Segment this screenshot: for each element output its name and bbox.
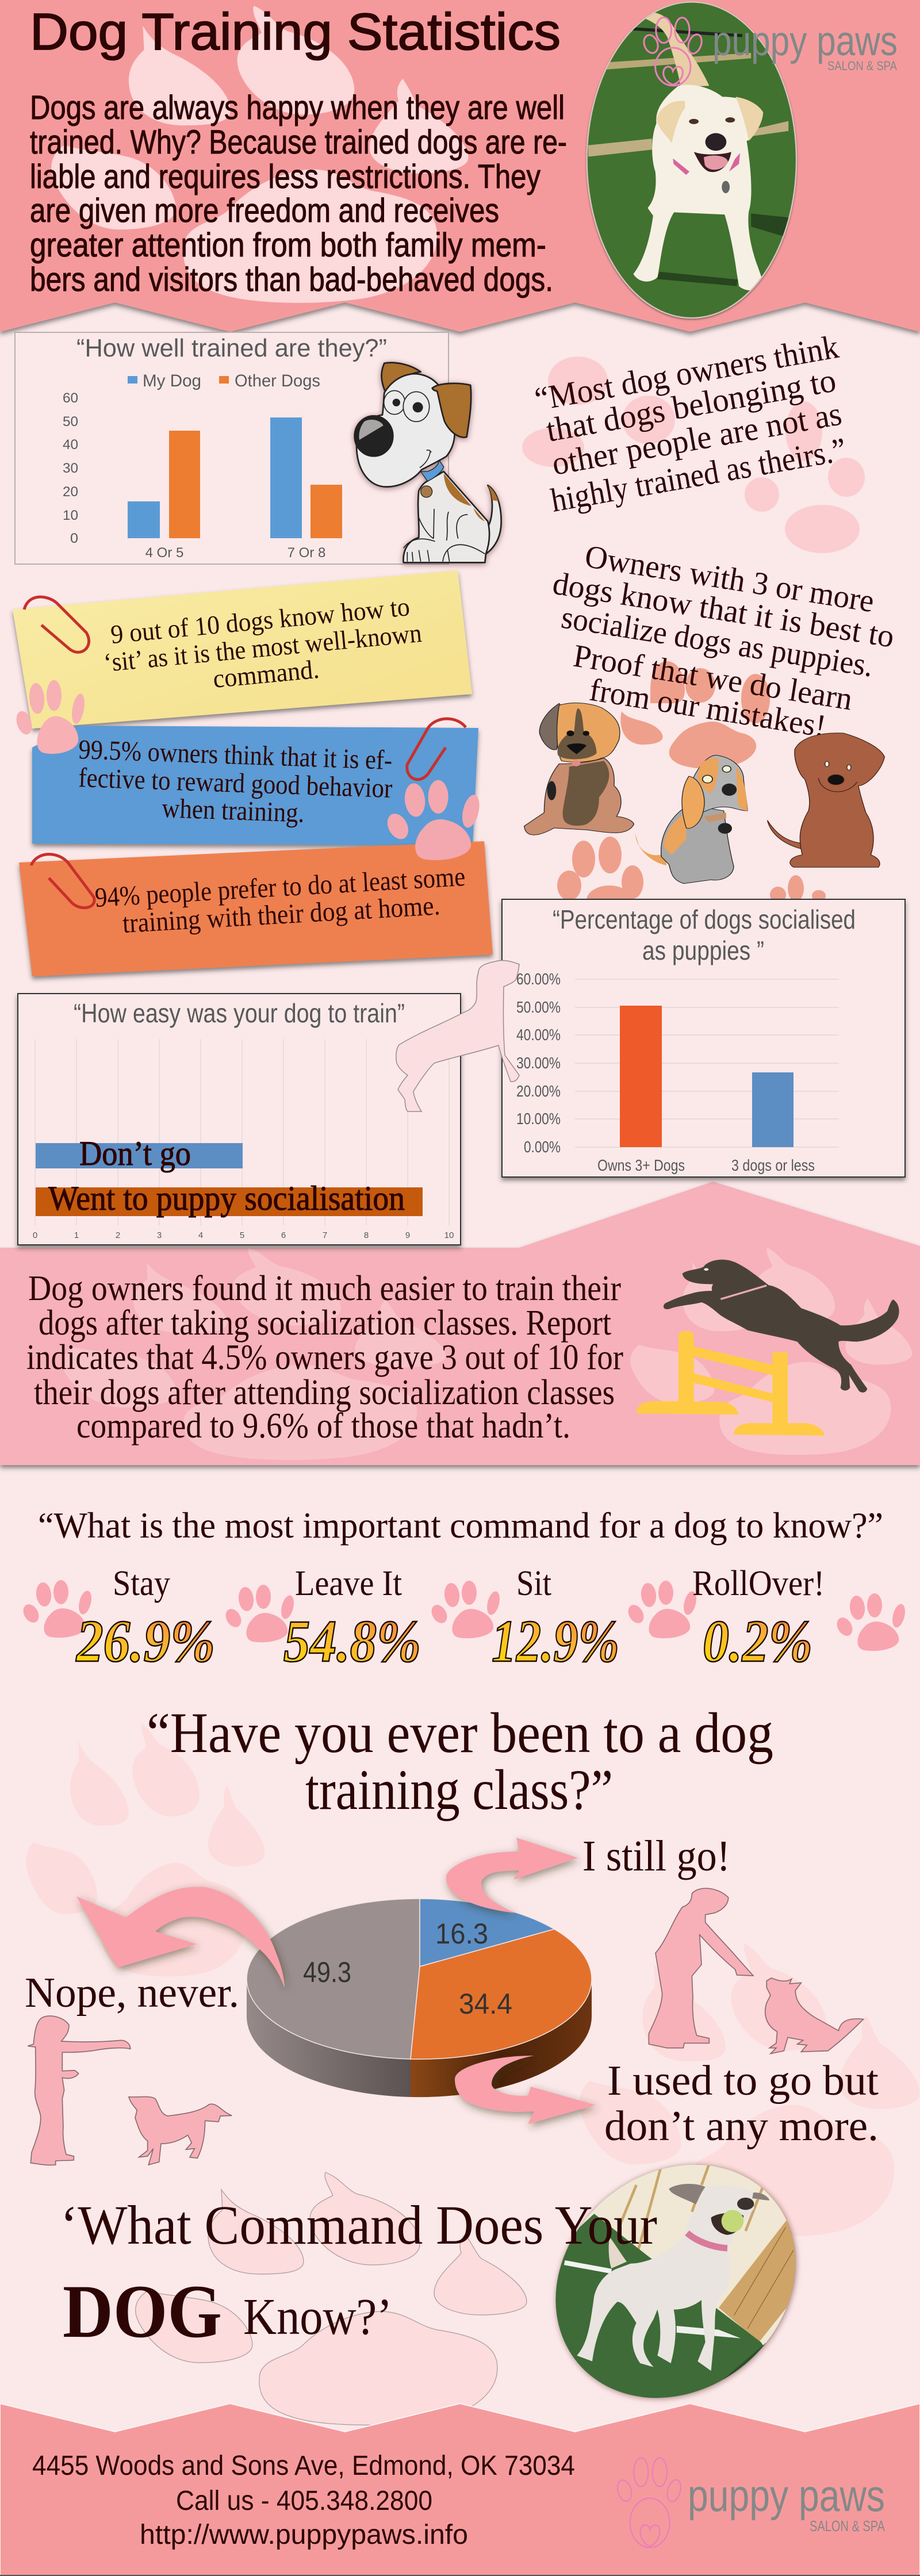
bar: went to puppy socialisation: Went to puppy socialisation: [48, 1179, 405, 1217]
intro text: are given more freedom and receives: [30, 192, 499, 229]
y axis: 20: [63, 484, 78, 500]
x axis labels: [33, 1230, 454, 1240]
pie chart: training class attendance: 49.3: [303, 1956, 351, 1988]
band background paw left: [63, 1248, 446, 1460]
logo: puppy paws footer: [615, 2458, 885, 2548]
y axis: 0: [70, 531, 78, 546]
closing headline: ‘What Command Does Your: [60, 2194, 657, 2256]
sticky text orange: training with their dog at home.: [122, 890, 441, 939]
y axis: 10: [63, 508, 78, 523]
x axis labels: 1: [74, 1230, 79, 1240]
label: i still go: I still go!: [582, 1832, 730, 1880]
y axis: 40: [63, 437, 78, 453]
sticky text yellow: command.: [212, 654, 320, 693]
salmon paws behind dogs: [557, 661, 826, 915]
label: used to go: don’t any more.: [604, 2103, 879, 2150]
sticky text blue: [78, 734, 393, 829]
heading: dog training class: “Have you ever been to a dog: [147, 1701, 773, 1765]
icon: jumping dog: [664, 1260, 899, 1393]
intro text: Dogs are always happy when they are well: [30, 89, 565, 126]
band text: Dog owners found it much easier to train their: [28, 1269, 621, 1308]
footer address: 4455 Woods and Sons Ave, Edmond, OK 73034: [32, 2451, 575, 2481]
label: nope never: Nope, never.: [25, 1969, 239, 2017]
x axis labels: 3: [157, 1230, 162, 1240]
quote: owners with 3 or more: from our mistakes!: [587, 672, 829, 745]
logo: puppy paws footer: SALON & SPA: [810, 2517, 885, 2535]
quote: most dog owners: highly trained as theirs.”: [548, 430, 849, 519]
puppy left: [524, 703, 634, 835]
icon: paperclip orange: [31, 854, 94, 908]
photo: happy dog on grass: [584, 0, 799, 321]
x axis labels: 5: [240, 1230, 244, 1240]
stat: leave it: 54.8%: [283, 1608, 421, 1674]
legend: My Dog: [143, 371, 201, 390]
intro text: trained. Why? Because trained dogs are re-: [30, 124, 567, 161]
x axis labels: 8: [364, 1230, 369, 1240]
icon: woman and dog silhouettes right: [649, 1888, 864, 2054]
y axis: 60: [63, 390, 78, 406]
y axis labels: 10.00%: [516, 1110, 561, 1128]
sticky text blue: 99.5% owners think that it is ef-: [78, 734, 393, 776]
heading: dog training class: [147, 1701, 773, 1822]
arrow: to nope never: [76, 1887, 285, 1988]
intro text: [30, 89, 567, 298]
grid lines: [35, 1039, 449, 1226]
x axis labels: 3 dogs or less: [731, 1156, 815, 1174]
chart: percentage of dogs socialised: as puppies ”: [642, 936, 764, 965]
band text: indicates that 4.5% owners gave 3 out of 10 for: [26, 1338, 623, 1377]
sticky text blue: fective to reward good behavior: [78, 762, 393, 804]
bar: don't go: Don’t go: [79, 1134, 191, 1172]
icon: paw on yellow note: [13, 680, 87, 754]
icon: cartoon dog: [355, 363, 501, 562]
chart title: “How well trained are they?”: [76, 334, 387, 362]
y axis labels: 30.00%: [516, 1054, 561, 1072]
y axis labels: 40.00%: [516, 1026, 561, 1044]
sticky text blue: when training.: [162, 793, 305, 829]
x axis labels: 6: [281, 1230, 286, 1240]
question: most important command: “What is the most important command for a dog to know?”: [38, 1505, 883, 1546]
x axis labels: 0: [33, 1230, 37, 1240]
band background paw right: [630, 1248, 912, 1455]
stat: stay: Stay: [113, 1564, 170, 1603]
photo: dog with tennis ball: [553, 2161, 800, 2402]
bars: [128, 417, 342, 538]
stat: sit: Sit: [516, 1564, 551, 1603]
closing headline: DOG: [63, 2269, 222, 2353]
stat: leave it: [283, 1564, 421, 1674]
closing headline: [60, 2194, 657, 2353]
panel: header banner: [0, 0, 920, 332]
quote: owners with 3 or more: Owners with 3 or more: [582, 539, 876, 619]
x axis labels: 10: [444, 1230, 454, 1240]
y axis labels: 0.00%: [524, 1138, 561, 1156]
y axis: 50: [63, 414, 78, 430]
background paw behind quote: [522, 356, 865, 553]
y axis: 30: [63, 461, 78, 476]
chart: how well trained are they: [15, 332, 448, 564]
quote: owners with 3 or more: socialize dogs as puppies.: [559, 600, 876, 684]
sticky text yellow: 9 out of 10 dogs know how to: [109, 592, 411, 649]
title: Dog Training Statistics: [30, 3, 561, 61]
stat: sit: [492, 1564, 619, 1674]
legend: Other Dogs: [235, 371, 320, 390]
background paw right of pie: [580, 1943, 919, 2237]
legend: [128, 371, 320, 390]
quote: owners with 3 or more: Proof that we do learn: [571, 638, 855, 717]
footer address: Call us - 405.348.2800: [176, 2486, 432, 2516]
footer address: http://www.puppypaws.info: [140, 2520, 468, 2550]
intro text: greater attention from both family mem-: [30, 227, 546, 264]
intro text: liable and requires less restrictions. They: [30, 158, 540, 195]
bars: [620, 1006, 662, 1147]
stat: leave it: Leave It: [295, 1564, 402, 1603]
header background paw: [51, 6, 468, 303]
panel: footer: [0, 2404, 920, 2576]
intro text: bers and visitors than bad-behaved dogs.: [30, 261, 553, 298]
icon: woman and dog silhouettes left: [28, 2016, 232, 2165]
band text: dogs after taking socialization classes. Report: [39, 1304, 611, 1343]
bar: don't go: [36, 1134, 243, 1172]
stat: sit: 12.9%: [492, 1608, 619, 1674]
label: used to go: I used to go but: [607, 2057, 879, 2104]
chart: how easy was your dog to train: [18, 994, 461, 1245]
stat: roll over: [692, 1564, 825, 1674]
sticky text yellow: [102, 592, 423, 693]
icon: paperclip yellow: [24, 597, 89, 652]
y axis labels: 20.00%: [516, 1082, 561, 1100]
x axis labels: 7: [323, 1230, 327, 1240]
y axis labels: 60.00%: [516, 970, 561, 988]
heading: dog training class: training class?”: [305, 1758, 613, 1822]
y axis labels: 50.00%: [516, 998, 561, 1016]
sticky text orange: 94% people prefer to do at least some: [94, 861, 466, 913]
band text: compared to 9.6% of those that hadn’t.: [76, 1406, 570, 1446]
sticky text orange: [94, 861, 466, 939]
x axis labels: 9: [405, 1230, 410, 1240]
x axis labels: [597, 1156, 815, 1174]
logo: puppy paws header: [642, 17, 898, 86]
quote: most dog owners: that dogs belonging to: [543, 361, 839, 449]
icon: paperclip blue: [407, 719, 466, 780]
quote: owners with 3 or more: dogs know that it is best to: [550, 566, 896, 655]
sticky note: orange: [19, 841, 493, 976]
puppy right: [768, 733, 884, 867]
icon: three cartoon puppies: [524, 703, 884, 884]
logo: puppy paws header: SALON & SPA: [827, 59, 897, 73]
label: used to go: [604, 2057, 879, 2150]
background paw left of pie: [26, 1724, 264, 1976]
x axis labels: 2: [116, 1230, 120, 1240]
x axis labels: 4: [198, 1230, 203, 1240]
icon: paw on blue note: [383, 780, 482, 860]
quote: most dog owners: “Most dog owners think: [532, 328, 841, 418]
row of pink paws: [20, 1580, 907, 1651]
arrow: to used to go: [455, 2056, 596, 2124]
icon: hurdle: [637, 1331, 825, 1436]
sticky note: blue: [32, 726, 478, 845]
grid lines: [575, 979, 839, 1147]
sticky text yellow: ‘sit’ as it is the most well-known: [102, 618, 423, 677]
quote: most dog owners: other people are not as: [549, 394, 845, 482]
chart title: “Percentage of dogs socialised: [553, 904, 856, 934]
stat: stay: [75, 1564, 215, 1674]
pie chart: training class attendance: 34.4: [459, 1988, 512, 2020]
panel: pink roofed band: [0, 1182, 920, 1465]
x axis labels: Owns 3+ Dogs: [597, 1156, 685, 1174]
sticky note: yellow: [13, 570, 472, 729]
x axis labels: [145, 545, 325, 561]
pie chart: training class attendance: 16.3: [435, 1918, 488, 1950]
footer address: [32, 2451, 575, 2550]
chart: percentage of dogs socialised: [502, 899, 905, 1177]
closing headline: Know?’: [243, 2288, 392, 2345]
puppy middle: [635, 755, 747, 884]
chart title: “How easy was your dog to train”: [74, 998, 405, 1028]
y axis labels: [516, 970, 561, 1156]
quote: most dog owners: [532, 328, 849, 519]
stat: roll over: RollOver!: [692, 1564, 825, 1603]
stat: stay: 26.9%: [75, 1608, 215, 1674]
quote: owners with 3 or more: [550, 539, 896, 745]
icon: pale dog silhouette: [396, 960, 519, 1111]
x axis labels: 7 Or 8: [288, 545, 325, 561]
outlined background paw: [136, 2172, 527, 2425]
logo: puppy paws footer: puppy paws: [688, 2470, 885, 2521]
y axis: [63, 390, 78, 546]
band text: their dogs after attending socialization classes: [34, 1373, 615, 1412]
pie chart: training class attendance: [247, 1899, 592, 2097]
arrow: to i still go: [446, 1838, 578, 1913]
band text: [26, 1269, 623, 1446]
stat: roll over: 0.2%: [703, 1608, 812, 1674]
x axis labels: 4 Or 5: [145, 545, 183, 561]
